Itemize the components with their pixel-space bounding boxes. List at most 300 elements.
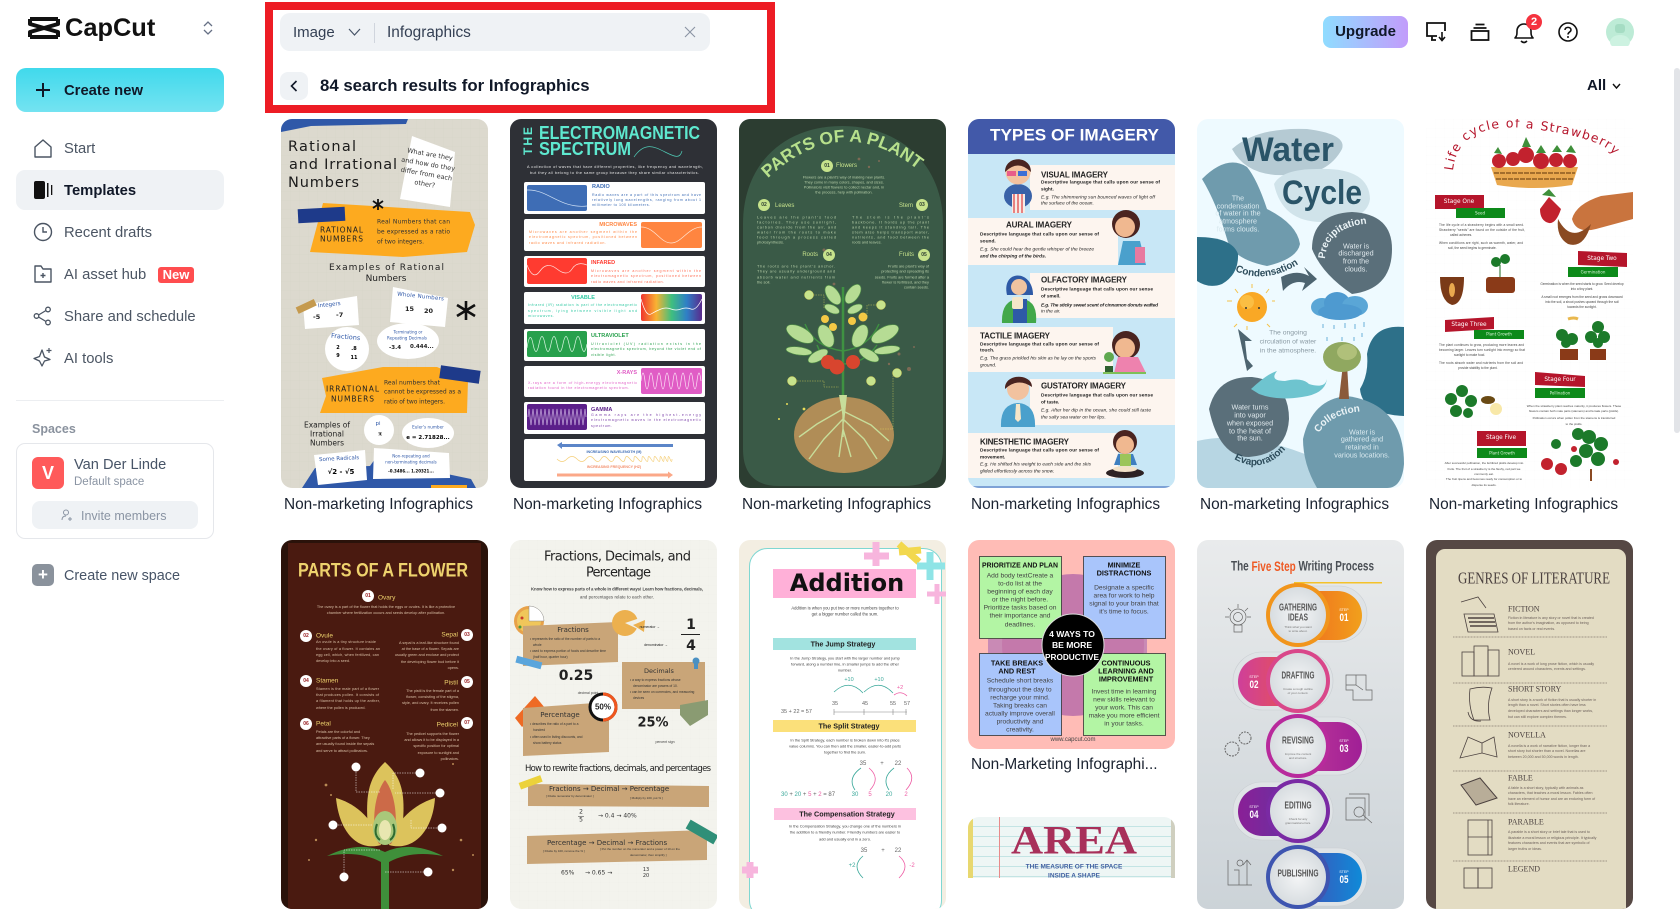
section: visual: E.g. The shimmering sun bounced waves of light off: [1041, 194, 1156, 200]
row: ultraviolet: visible light.: [591, 353, 616, 357]
row: x-rays: radiation found in the electromagnetic spectrum.: [528, 386, 629, 390]
illustration: plant: [783, 282, 902, 395]
panel: continuous learning: your work. This can: [1095, 704, 1153, 712]
section: jump strategy: 35 + 22 = 57: [781, 709, 812, 715]
card: non-repeating decimals: -0.3486... 1.20321...: [388, 468, 434, 474]
note: fractions: (half hour, quarter hour): [533, 655, 568, 659]
note: conversion 1: [519, 775, 709, 807]
section: jump strategy: +10: [874, 677, 884, 683]
stage one: soil, the seed begins to germinate.: [1448, 246, 1497, 250]
step 4: STEP: [1249, 805, 1259, 809]
bubble: euler: Euler's number: [412, 424, 444, 430]
icon: stack: [1470, 24, 1490, 41]
heading: examples of rational numbers: Examples of Rational: [329, 263, 444, 273]
subtitle: THE MEASURE OF THE SPACE: [1026, 864, 1123, 870]
title: THE: [521, 127, 535, 155]
row: fiction: based on facts or real events.: [1508, 627, 1555, 631]
section: jump strategy: +10: [844, 677, 854, 683]
text: collection description: Water is: [1349, 428, 1375, 436]
panel: prioritize and plan: PRIORITIZE AND PLAN: [982, 560, 1058, 570]
text: condensation description: [1215, 194, 1261, 234]
step 2: 02: [1250, 679, 1258, 691]
row: short story: [1468, 684, 1596, 721]
chart: 50 percent ring: 50%: [595, 702, 611, 712]
number: 25 percent: 25%: [637, 716, 669, 730]
step 4: EDITING: [1284, 800, 1312, 812]
row: fiction: Fiction in literature is any story or novel that is created: [1508, 616, 1594, 620]
row: gamma: [524, 402, 705, 434]
fraction: one quarter: 1: [686, 617, 696, 633]
row: ultraviolet: ULTRAVIOLET: [591, 333, 629, 339]
section: jump strategy: The Jump Strategy: [811, 640, 875, 648]
note: decimals: devices: [633, 696, 645, 700]
section: kinesthetic: glided effortlessly across the snow.: [980, 468, 1054, 474]
section: tactile: TACTILE IMAGERY: [980, 332, 1051, 340]
section: leaves: Leaves: [775, 203, 794, 209]
red highlight frame with search: [265, 2, 775, 113]
subtitle: [1026, 864, 1123, 880]
text: evaporation description: Water turns: [1232, 402, 1269, 412]
section: split strategy: +: [880, 761, 884, 767]
stage three: sunlight to make food.: [1454, 353, 1485, 357]
header: [968, 119, 1175, 154]
title: Numbers: [288, 175, 359, 191]
step 2: of your content.: [1288, 691, 1309, 695]
note: decimals: • a way to express fractions whose: [630, 678, 681, 682]
icon: notifications: [1514, 14, 1542, 44]
section: ovary: The ovary is a part of the flower that holds the eggs or ovules. It is like a protective: [317, 605, 455, 609]
stage four: flowers contain both male parts (stamens) and female parts (pistils).: [1529, 409, 1619, 413]
section: split strategy: value columns. You can then add the smaller, easier-to-add parts: [789, 744, 901, 748]
card: whole numbers: 15: [405, 305, 415, 313]
row: microwaves: radio waves and infrared radiation.: [529, 241, 606, 245]
button: invite members: Invite members: [81, 509, 166, 523]
badge: 4 ways: BE MORE: [1052, 640, 1092, 650]
bubble: fractions: 11: [351, 355, 358, 361]
section: aural: Descriptive language that calls upon our sense of: [980, 232, 1099, 238]
scrollbar: [1674, 68, 1680, 433]
icon: notifications: 2: [1531, 16, 1537, 28]
note: question: [397, 136, 458, 207]
illustration markers: [788, 290, 902, 429]
step 1: IDEAS: [1288, 612, 1308, 624]
arrow: left: [1238, 329, 1253, 371]
panel: irrational numbers: [320, 365, 481, 413]
card: strawberry life cycle: [1426, 119, 1633, 488]
nav item: AI tools: [33, 348, 113, 367]
step 5: 05: [1340, 874, 1348, 886]
section: compensation strategy: the addition to a friendly number. Friendly numbers are easier to: [790, 830, 900, 834]
section: leaves: Leaves are the plant's food: [757, 214, 836, 220]
step 4: [1233, 779, 1333, 843]
row: novella: [1460, 730, 1590, 759]
note: percentage: • often used in listing discounts, and: [530, 735, 583, 739]
bubble: pi: π: [378, 430, 382, 438]
icon: gears: [1225, 732, 1251, 756]
stage five: disperse its seeds.: [1472, 483, 1497, 487]
subtitle: Know how to express parts of a whole in different ways! Learn how fractions, decimals,: [531, 586, 703, 592]
section: compensation strategy: The Compensation Strategy: [799, 810, 895, 818]
panel: continuous learning: IMPROVEMENT: [1099, 674, 1154, 684]
row: gamma: spectrum.: [591, 424, 612, 428]
text: precipitation description: discharged: [1338, 248, 1374, 258]
text: evaporation description: into vapor: [1234, 410, 1266, 420]
row: visible: microwaves.: [528, 314, 554, 318]
section: pistil: The pistil is the female part of a: [406, 689, 460, 693]
row: parable: [1468, 818, 1597, 855]
card: electromagnetic spectrum: [510, 119, 717, 488]
row: fiction: from the author's imagination, as opposed to being: [1508, 621, 1589, 625]
section: pedicel: The pedicel supports the flower: [406, 732, 460, 736]
stage one: Strawberry "seeds" are found on the outside of the fruit,: [1439, 228, 1525, 232]
panel: continuous learning: new skills relevant to: [1093, 696, 1155, 704]
section: fruits: contain seeds.: [904, 284, 929, 290]
note: question: and how do they: [401, 156, 456, 173]
section: visual: VISUAL IMAGERY: [1041, 170, 1109, 180]
text: collection description: gathered and: [1341, 434, 1383, 444]
text: examples of irrational numbers: Examples of: [304, 420, 350, 430]
title: [521, 123, 700, 159]
card: some radicals: [314, 450, 367, 485]
tape: [515, 656, 542, 669]
bubble: terminating decimals: Terminating or: [393, 330, 423, 334]
note: fractions: • used to express portion of foods and describe time: [530, 649, 606, 653]
stage four: [1527, 372, 1622, 426]
row: novel: A novel is a work of long prose fiction, which is usually: [1508, 662, 1594, 666]
section: stem: roots and leaves.: [852, 240, 882, 244]
search bar: Image: [293, 24, 335, 41]
section: split strategy: [773, 720, 916, 798]
icon: user avatar: [1606, 18, 1634, 46]
panel: take breaks and rest: [980, 654, 1062, 736]
section: stem: Stem: [899, 203, 913, 209]
illustration: seedling: [1440, 254, 1515, 305]
section: fruits: flower is fertilized, and they: [882, 280, 929, 284]
panel: rational numbers: Real Numbers that can: [377, 218, 450, 226]
text: examples of irrational numbers: Irrational: [310, 430, 344, 438]
search bar: Infographics: [387, 24, 471, 41]
row: parable: illustrate a moral lesson or religious principle. It typically: [1508, 836, 1597, 840]
section: ovule: An ovule is a tiny structure inside: [316, 640, 376, 644]
button: create new space: [32, 564, 180, 586]
icon: sun: [1227, 284, 1275, 330]
section: stem: nutrients, and food between the: [852, 234, 929, 240]
section: gustatory: E.g. After her dip in the ocean, she could still taste: [1041, 408, 1151, 414]
inner page: [1436, 549, 1626, 909]
card: integers: Integers: [318, 301, 341, 309]
section: pistil: style, and ovary. It receives pollen: [402, 701, 459, 705]
card: parts of a plant: [739, 119, 946, 488]
bottom blue banner: [302, 459, 476, 488]
nav item: AI tools: AI tools: [64, 351, 113, 367]
arrow: top: [1281, 267, 1317, 291]
stage one: Stage One: [1444, 199, 1475, 205]
stage five: Stage Five: [1486, 435, 1516, 441]
section: leaves: carbon dioxide from the air, and: [757, 224, 836, 230]
section: stem: and keeps it standing tall. The: [852, 224, 929, 230]
bubble: euler: e = 2.71828...: [406, 435, 450, 441]
number: 0.25: [559, 668, 598, 695]
section: sepal: opens.: [448, 666, 459, 670]
section: olfactory: [1030, 273, 1175, 318]
stage two: into the soil, a shoot pushes upward through the soil: [1545, 300, 1619, 304]
section: stamen: where the pollen is produced.: [316, 706, 366, 710]
section: split strategy: 5: [868, 792, 872, 798]
top blue banner: [281, 119, 408, 132]
section: compensation strategy: -2: [909, 863, 915, 869]
step 4: 04: [1250, 809, 1259, 821]
label: card 6: Non-marketing Infographics: [1429, 496, 1618, 513]
section: olfactory: Descriptive language that calls upon our sense: [1041, 286, 1153, 292]
section: jump strategy: 35: [832, 701, 838, 707]
stage two: A small root emerges from the seed and grows downward: [1541, 295, 1623, 299]
icon: tag: [515, 696, 545, 727]
paint splatter: [778, 158, 915, 420]
bubble: fractions: Fractions: [331, 332, 361, 342]
note: question: other?: [414, 178, 436, 190]
number: 0.25: 0.25: [559, 668, 593, 684]
icon: space avatar: V: [42, 463, 54, 483]
row: infrared: radio waves and infrared radiation.: [591, 280, 664, 284]
stage two: Stage Two: [1587, 256, 1617, 262]
section: split strategy: 2: [904, 792, 908, 798]
title: and Irrational: [289, 157, 397, 173]
section: fruits: [875, 249, 930, 290]
step 2: STEP: [1249, 675, 1259, 679]
decorative wave: [634, 147, 682, 157]
stage one: Seed: [1475, 210, 1485, 216]
section: ovary: [317, 590, 455, 615]
badge: 4 ways: PRODUCTIVE: [1045, 652, 1099, 662]
note: percentage: hundred: [533, 728, 545, 732]
subtitle: and percentages relate to each other.: [580, 594, 654, 600]
section: aural: and the chirping of the birds.: [980, 254, 1046, 260]
note: decimals: [622, 662, 705, 709]
row: short story: developed characters and settings than longer works,: [1508, 709, 1593, 713]
row: visible: Infrared (IR) radiation is part of the electromagnetic: [528, 303, 637, 307]
text: ongoing circulation: in the atmosphere.: [1260, 348, 1316, 354]
note: fractions: whole: [533, 643, 542, 647]
arc label: precipitation: [1325, 223, 1377, 259]
section: petal: and serve to attract pollinators.: [316, 749, 368, 753]
note: conversion 1: [ Divide numerator by denominator ]: [546, 794, 594, 798]
section: sepal: usually green and enclose and protect: [395, 653, 460, 657]
step 4: grammatical errors.: [1285, 821, 1311, 825]
section: split strategy: together to find the sum.: [824, 750, 866, 754]
section: roots: absorb water and nutrients from: [757, 274, 835, 280]
row: radio: RADIO: [592, 184, 610, 190]
row: novel: NOVEL: [1508, 648, 1535, 656]
card: integers: [296, 296, 359, 329]
section: petal: Petal: [316, 720, 331, 728]
title: [544, 550, 691, 580]
section: compensation strategy: In the Compensation Strategy, you change one of the numbers in: [789, 824, 901, 828]
row: microwaves: electromagnetic spectrum, positioned between: [529, 235, 637, 239]
section: leaves: food through a process called: [757, 234, 836, 240]
section: jump strategy: 45: [862, 701, 868, 707]
row: radio: relatively long wavelengths, ranging from about 1: [592, 198, 701, 202]
illustration: soil and roots: [794, 395, 894, 473]
section: kinesthetic: movement.: [980, 454, 1005, 460]
nav item: AI asset hub: New: [163, 267, 189, 282]
illustration: fruiting plant: [1541, 428, 1619, 481]
section: fruits: protecting and spreading its: [881, 268, 929, 274]
title: Rational: [288, 139, 356, 155]
equation: 65 percent: → 0.65 →: [585, 870, 612, 876]
row: visible: VISABLE: [571, 295, 595, 301]
icon: puzzle: [1346, 675, 1372, 700]
panel: continuous learning: CONTINUOUS: [1101, 658, 1151, 668]
section: compensation strategy: +2: [849, 863, 856, 869]
card: water cycle: Precipitation: [1318, 218, 1366, 258]
section: petal: [300, 718, 374, 753]
section: roots: 04: [826, 252, 832, 258]
icon: pie: [612, 610, 645, 636]
bottom rule: [968, 486, 1175, 488]
step 1: to write about.: [1289, 629, 1308, 633]
section: stem: 03: [919, 202, 925, 208]
row: infrared: INFARED: [591, 260, 615, 266]
heading: how to rewrite: How to rewrite fractions, decimals, and percentages: [525, 764, 712, 774]
title: ELECTROMAGNETIC: [539, 123, 700, 143]
row: legend: LEGEND: [1508, 864, 1540, 874]
stage three: provide stability to the plant.: [1458, 366, 1498, 370]
section: petal: are usually found inside the sepals: [316, 742, 374, 746]
card: some radicals: Some Radicals: [319, 455, 359, 463]
title: Percentage: [586, 566, 651, 580]
panel: continuous learning: LEARNING AND: [1098, 666, 1154, 676]
button: invite members: [32, 501, 198, 529]
legend: wavelength and frequency: INCREASING WAVELENGTH (M): [586, 450, 642, 454]
row: radio: [524, 182, 705, 214]
nav item: start: Start: [64, 141, 95, 157]
step 3: STEP: [1339, 739, 1349, 743]
section: jump strategy: forward, along a number line, in smaller jumps to add the other: [791, 662, 900, 666]
panel: take breaks and rest: recharge your mind.: [990, 694, 1050, 702]
card: water cycle: Collection: [1314, 406, 1360, 432]
section: ovary: 01: [365, 593, 371, 599]
step 2: [1233, 649, 1333, 713]
text: examples of irrational numbers: Numbers: [310, 438, 344, 448]
bubble: fractions: [325, 327, 369, 371]
card: some radicals: √2 - √5: [328, 468, 355, 476]
panel: prioritize and plan: to-do list at the: [998, 580, 1042, 588]
section: fruits: Fruits: [899, 252, 914, 258]
illustration: hand and seed: [1540, 189, 1633, 245]
figure: cooking child: [1106, 430, 1144, 478]
figure: girl listening: [1112, 210, 1146, 265]
bubble: terminating decimals: -3.4: [389, 345, 401, 351]
section: gustatory: GUSTATORY IMAGERY: [1041, 382, 1127, 390]
section: sepal: the developing flower bud before it: [401, 660, 460, 664]
subtitle: A collection of waves that have different properties, like frequency and wavelength,: [527, 165, 703, 169]
section: gustatory: of taste.: [1041, 400, 1059, 406]
text: precipitation description: [1338, 242, 1374, 274]
step 5: STEP: [1339, 870, 1349, 874]
panel: minimize distractions: Designate a specific: [1094, 584, 1155, 592]
splatter: [308, 763, 474, 871]
badge: 4 ways: [1042, 614, 1104, 676]
section: ovule: [300, 630, 380, 663]
bubble: fractions: .8: [351, 346, 357, 352]
section: compensation strategy: add and usually end in a zero.: [819, 836, 871, 842]
panel: prioritize and plan: beginning of each day: [987, 588, 1053, 596]
bubble: terminating decimals: 0.444...: [410, 344, 434, 350]
stage two: [1540, 251, 1627, 309]
row: x-rays: X-rays are a form of high-energy electromagnetic: [528, 381, 637, 385]
equation: 2/5: 2: [579, 808, 583, 816]
section: olfactory: of smell.: [1041, 294, 1060, 300]
section: visual: [1030, 165, 1175, 210]
header: TYPES OF IMAGERY: [990, 126, 1160, 144]
section: kinesthetic: KINESTHETIC IMAGERY: [980, 438, 1070, 446]
row: infrared: Microwaves are another segment within the: [591, 269, 701, 273]
stage five: fruits. The fruit of a strawberry is the fleshy, red part we: [1448, 467, 1521, 471]
row: parable: features characters and events that are symbolic of: [1508, 841, 1590, 845]
row: novella: A novella is a work of narrative fiction, longer than a: [1508, 744, 1590, 748]
note: conversion 2: [ Put the number on the numerator and a power of 10 on the: [600, 847, 680, 851]
stage three: becoming larger. Leaves turn sunlight into energy so that: [1439, 348, 1525, 352]
label: card 10: Non-Marketing Infographi...: [971, 756, 1158, 773]
button: create new: Create new: [64, 83, 143, 99]
section: kinesthetic: E.g. He shifted his weight to each side and the skis: [980, 462, 1092, 468]
icon: tree: [1323, 342, 1361, 399]
section: pedicel: Pedicel: [437, 722, 459, 728]
section: split strategy: The Split Strategy: [818, 722, 880, 730]
row: novel: [1462, 646, 1594, 676]
text: examples of irrational numbers: [304, 420, 350, 448]
label: card 3: Non-marketing Infographics: [742, 496, 931, 513]
section: leaves: [757, 199, 836, 244]
title: Water: [1242, 131, 1334, 169]
card: integers: -5: [313, 313, 321, 321]
stage one: When conditions are right, such as warmth, water, and: [1439, 241, 1523, 245]
section: stem: backbone. It holds up the plant: [852, 220, 930, 224]
nav item: start: [34, 139, 96, 158]
arc label: condensation: [1235, 255, 1311, 276]
text: collection description: retained in: [1345, 442, 1379, 452]
separators: [1453, 637, 1607, 861]
section: pedicel: and allows it to be displayed in a: [404, 738, 460, 742]
note: conversion 2: Percentage → Decimal → Fractions: [547, 839, 667, 847]
step 5: [1266, 845, 1367, 909]
chart: 50 percent ring: [590, 694, 616, 720]
row: gamma: Gamma rays are the highest-energy: [591, 413, 701, 417]
number: 25 percent: [637, 716, 675, 744]
panel: minimize distractions: area for work to help: [1094, 592, 1155, 600]
section: split strategy: 35: [860, 761, 867, 767]
equation: 65 percent: 20: [643, 873, 649, 879]
figure: girl touching plant: [1103, 331, 1146, 374]
panel: prioritize and plan: Add body textCreate a: [987, 572, 1054, 580]
card: types of imagery: [968, 119, 1175, 488]
section: ovary: Ovary: [378, 594, 396, 602]
section: gustatory: the salty sea water on her lips.: [1041, 414, 1106, 420]
section: pedicel: [404, 717, 473, 761]
text: ongoing circulation: [1260, 330, 1317, 354]
section: tactile: Descriptive language that calls upon our sense of: [980, 342, 1099, 348]
arc label: evaporation: [1234, 435, 1296, 465]
section: compensation strategy: +: [881, 848, 885, 854]
panel: continuous learning: make you more efficient: [1089, 712, 1160, 720]
section: roots: The roots are the plant's anchor.: [757, 264, 835, 268]
label: card 5: Non-marketing Infographics: [1200, 496, 1389, 513]
row: ultraviolet: [524, 329, 705, 361]
row: radio: millimeter to 100 kilometers.: [592, 203, 650, 207]
icon: bulb: [1225, 604, 1251, 632]
section: flowers: [803, 160, 885, 194]
row: x-rays: [524, 366, 705, 397]
